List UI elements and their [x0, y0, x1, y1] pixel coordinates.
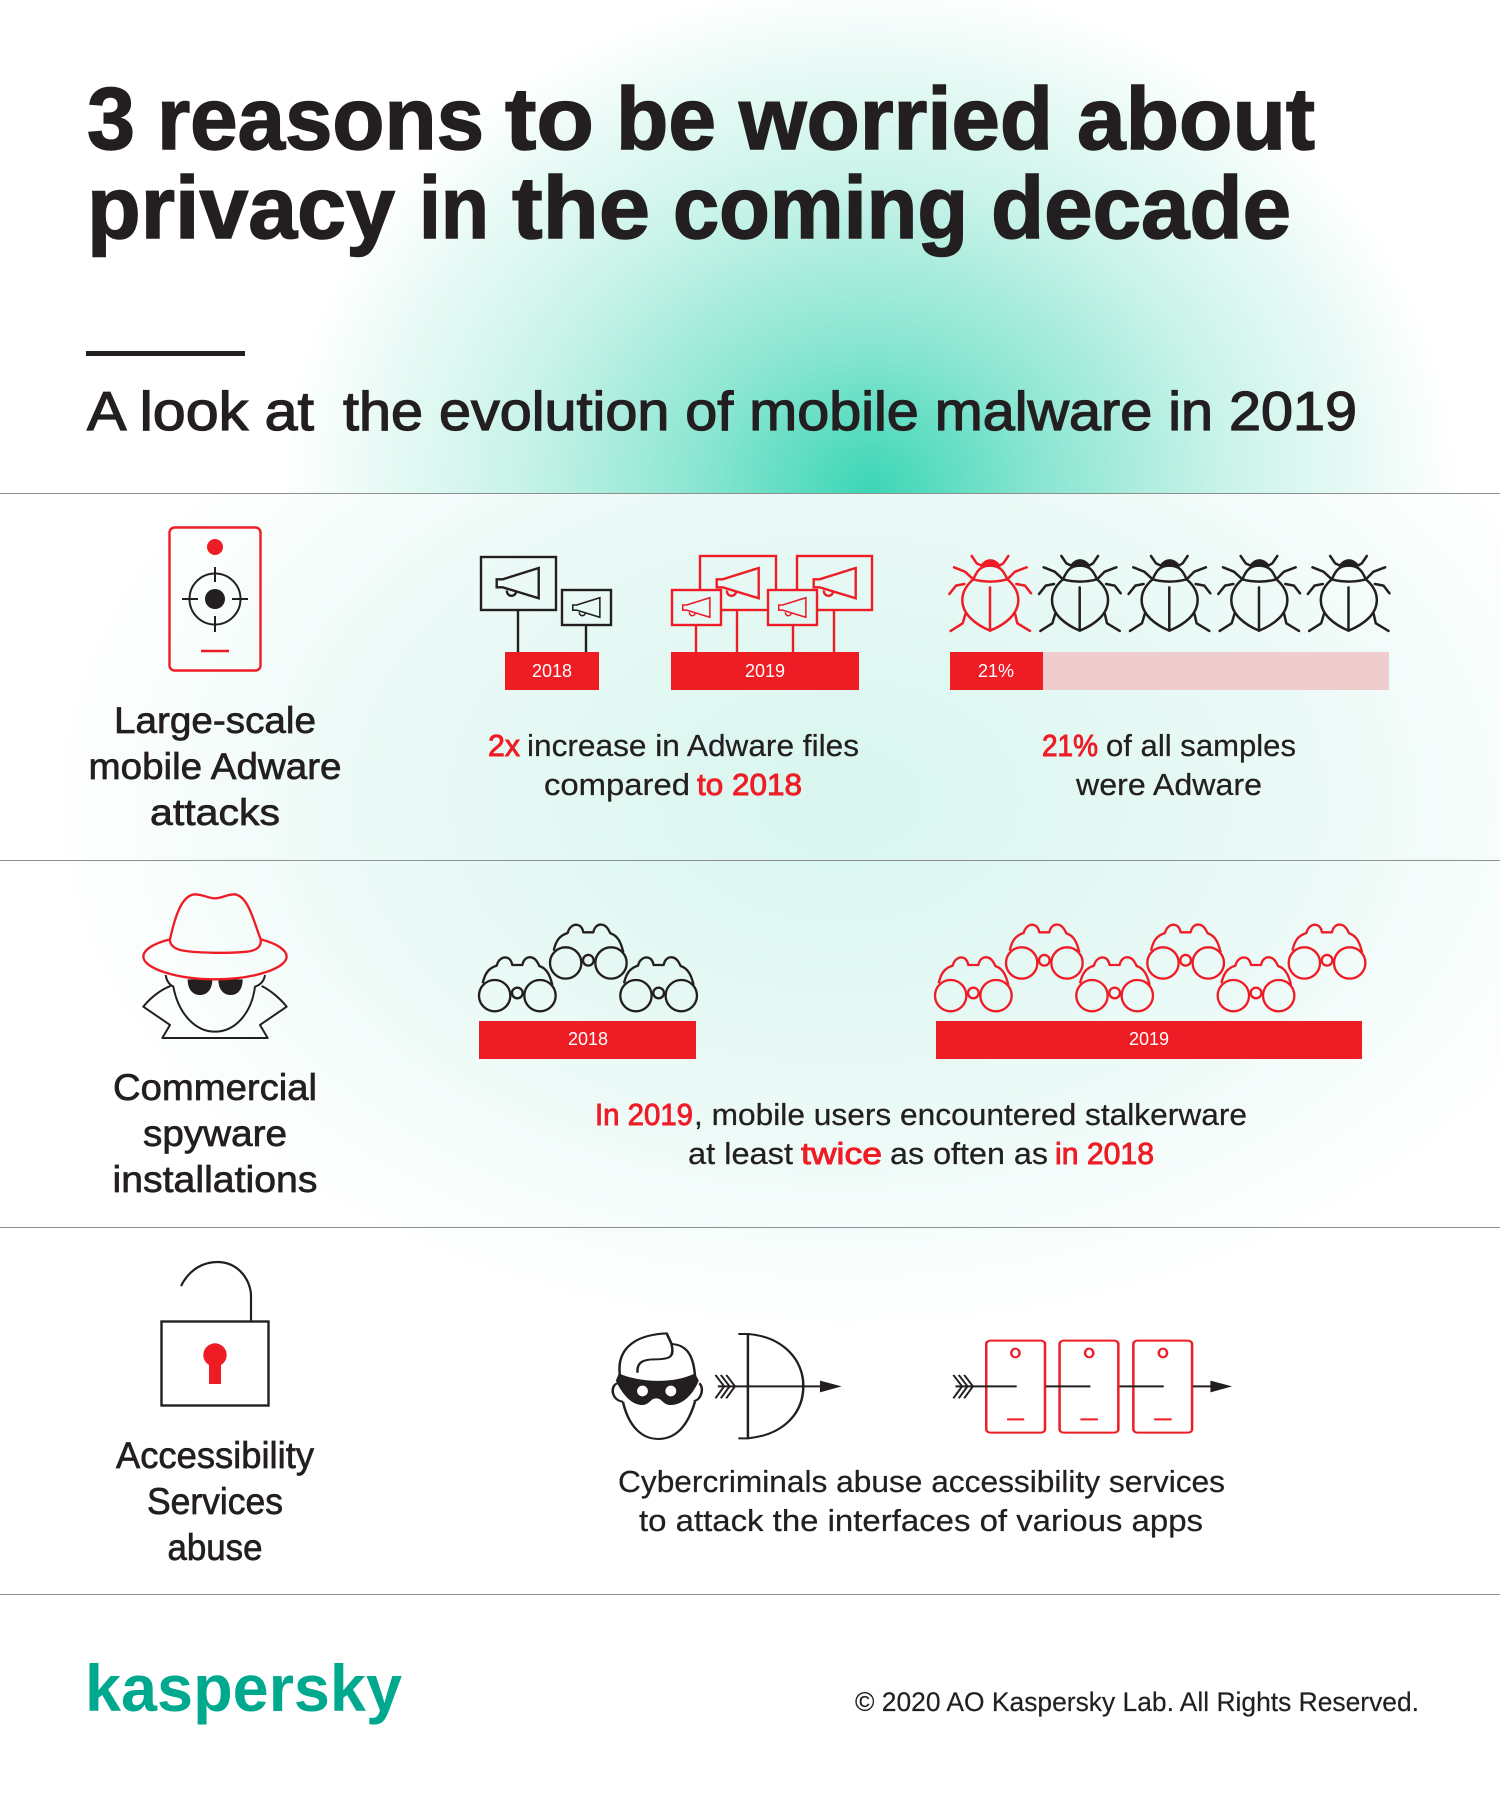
text: 21% of all samples: 21% [1042, 728, 1098, 763]
chart: stalkerware 2018 binoculars: 2018 [568, 1029, 608, 1049]
title: worried [738, 69, 1053, 168]
chart: adware 2018 billboards [481, 557, 611, 690]
heading: commercial spyware installations: installations [112, 1159, 318, 1200]
title: in [419, 158, 489, 257]
chart: stalkerware 2019 binoculars [935, 925, 1365, 1059]
title: coming [673, 158, 968, 257]
heading: commercial spyware installations: spyware [143, 1113, 287, 1154]
heading: large-scale mobile adware attacks [88, 700, 342, 833]
text: stalkerware statement: In 2019 [595, 1097, 693, 1132]
text: stalkerware statement: at least [688, 1136, 793, 1171]
text: 2x increase [488, 728, 859, 802]
chart: stalkerware 2018 binoculars [479, 925, 697, 1059]
heading: large-scale mobile adware attacks: Large-scale [114, 700, 316, 741]
icon: arrow through phones [953, 1341, 1232, 1433]
subtitle: A look at [87, 380, 314, 442]
text: 2x increase: increase in Adware files [527, 728, 859, 763]
heading rule [86, 351, 245, 356]
text: 2x increase: to 2018 [697, 767, 802, 802]
title: be [616, 69, 716, 168]
panel: accessibility services abuse [116, 1262, 1232, 1568]
heading: accessibility services abuse: abuse [168, 1527, 262, 1568]
heading: large-scale mobile adware attacks: attacks [150, 792, 280, 833]
icon: masked thief with bow [613, 1333, 842, 1439]
title: reasons [157, 69, 484, 168]
text: 21% of all samples: were Adware [1075, 767, 1262, 802]
chart: adware 2019 billboards: 2019 [745, 661, 785, 681]
text: stalkerware statement: as often as [890, 1136, 1048, 1171]
panel: commercial spyware [112, 894, 1365, 1200]
subtitle: the evolution of mobile malware in 2019 [343, 380, 1357, 442]
icon: spy in hat [143, 894, 287, 1038]
copyright: © 2020 AO Kaspersky Lab. All Rights Reserved. [855, 1687, 1419, 1717]
title: about [1077, 69, 1315, 168]
heading: accessibility services abuse: Accessibility [116, 1435, 314, 1476]
text: cybercriminals statement: to attack the interfaces of various apps [639, 1503, 1203, 1538]
icon: open padlock [162, 1262, 268, 1406]
title: to [505, 69, 594, 168]
chart: five bugs [949, 556, 1389, 631]
text: stalkerware statement: twice [801, 1136, 882, 1171]
heading: commercial spyware installations [112, 1067, 318, 1200]
text: cybercriminals statement [618, 1464, 1225, 1538]
chart: 21% progress bar: 21% [978, 661, 1014, 681]
chart: stalkerware 2019 binoculars: 2019 [1129, 1029, 1169, 1049]
title: privacy [87, 158, 395, 257]
heading: large-scale mobile adware attacks: mobile Adware [88, 746, 342, 787]
text: 21% of all samples: of all samples [1106, 728, 1296, 763]
panel: mobile adware attacks [88, 528, 1389, 833]
heading: accessibility services abuse [116, 1435, 314, 1568]
text: 2x increase: compared [544, 767, 690, 802]
title: the [512, 158, 650, 257]
text: cybercriminals statement: Cybercriminals abuse accessibility services [618, 1464, 1225, 1499]
title [87, 69, 1315, 257]
icon: phone with crosshair [170, 528, 260, 670]
text: 21% of all samples [1042, 728, 1296, 802]
text: stalkerware statement [595, 1097, 1247, 1171]
chart: adware 2019 billboards [671, 556, 872, 690]
text: stalkerware statement: in 2018 [1055, 1136, 1154, 1171]
title: decade [991, 158, 1291, 257]
logo: kaspersky: kaspersky [85, 1651, 402, 1725]
text: stalkerware statement: , mobile users encountered stalkerware [694, 1097, 1247, 1132]
heading: accessibility services abuse: Services [147, 1481, 283, 1522]
chart: 21% progress bar [950, 652, 1389, 690]
title: 3 [87, 69, 135, 168]
text: 2x increase: 2x [488, 728, 520, 763]
chart: adware 2018 billboards: 2018 [532, 661, 572, 681]
heading: commercial spyware installations: Commercial [113, 1067, 317, 1108]
